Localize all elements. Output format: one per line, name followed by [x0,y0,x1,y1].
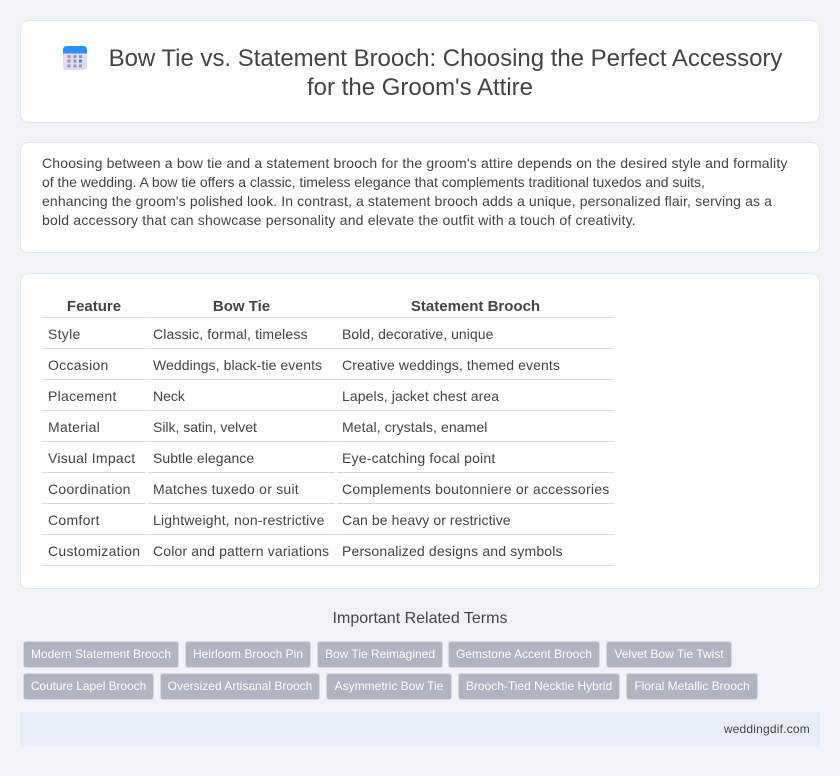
table: feature comparison: Comfort [48,512,100,528]
heading: related terms: Important Related Terms [333,610,507,627]
text block: introduction: of the wedding. A bow tie offers a classic, timeless elegance that complements traditional tuxedos and suits, [42,174,705,190]
tags: related terms [23,641,758,700]
tags: related terms: Asymmetric Bow Tie [335,679,443,693]
tags: related terms: Velvet Bow Tie Twist [614,647,724,661]
table: feature comparison: Bold, decorative, unique [342,326,493,342]
tags: related terms: Bow Tie Reimagined [325,647,435,661]
footer bar [20,712,820,746]
table: feature comparison: Style [48,326,81,342]
table: feature comparison: Creative weddings, themed events [342,357,560,373]
tags: related terms: Heirloom Brooch Pin [193,647,303,661]
tags: related terms: Floral Metallic Brooch [634,679,750,693]
tags: related terms: Modern Statement Brooch [31,647,171,661]
tags: related terms: Oversized Artisanal Brooch [168,679,312,693]
panel: introduction [20,142,820,253]
table: feature comparison: Customization [48,543,140,559]
footer source text: weddingdif.com [724,722,810,736]
tags: related terms: Gemstone Accent Brooch [456,647,592,661]
text block: introduction: enhancing the groom's polished look. In contrast, a statement brooch adds a unique, personalized flair, serving as a [42,193,772,209]
table: feature comparison: Weddings, black-tie events [153,357,322,373]
table: feature comparison: Placement [48,388,117,404]
panel: comparison table [20,273,820,589]
table: feature comparison: Classic, formal, timeless [153,326,308,342]
table header: Feature [67,298,121,315]
icon: calendar [63,46,87,70]
table: feature comparison: Personalized designs and symbols [342,543,563,559]
table: feature comparison: Material [48,419,100,435]
table: feature comparison: Visual Impact [48,450,135,466]
table: feature comparison: Color and pattern variations [153,543,329,559]
tags: related terms: Couture Lapel Brooch [31,679,146,693]
table: feature comparison: Occasion [48,357,109,373]
tags: related terms: Brooch-Tied Necktie Hybrid [466,679,612,693]
table: feature comparison: Lapels, jacket chest area [342,388,499,404]
panel: title header [20,20,820,123]
table: feature comparison: Metal, crystals, enamel [342,419,487,435]
text block: introduction [42,155,788,228]
table: feature comparison: Lightweight, non-restrictive [153,512,325,528]
table header: Statement Brooch [411,298,540,315]
table: feature comparison: Can be heavy or restrictive [342,512,511,528]
title [109,45,782,101]
table: feature comparison: Subtle elegance [153,450,254,466]
table: feature comparison: Complements boutonniere or accessories [342,481,609,497]
text block: introduction: bold accessory that can showcase personality and elevate the outfit with a touch of creativity. [42,212,636,228]
table: feature comparison: Silk, satin, velvet [153,419,257,435]
text block: introduction: Choosing between a bow tie and a statement brooch for the groom's attire depends on the desired style and formality [42,155,788,171]
table: feature comparison: Eye-catching focal point [342,450,495,466]
table header [67,298,540,315]
table: feature comparison: Coordination [48,481,131,497]
title: Bow Tie vs. Statement Brooch: Choosing the Perfect Accessory [109,45,782,72]
table: feature comparison: Neck [153,388,185,404]
table: feature comparison: Matches tuxedo or suit [153,481,299,497]
title: for the Groom's Attire [307,74,533,101]
table header: Bow Tie [213,298,270,315]
